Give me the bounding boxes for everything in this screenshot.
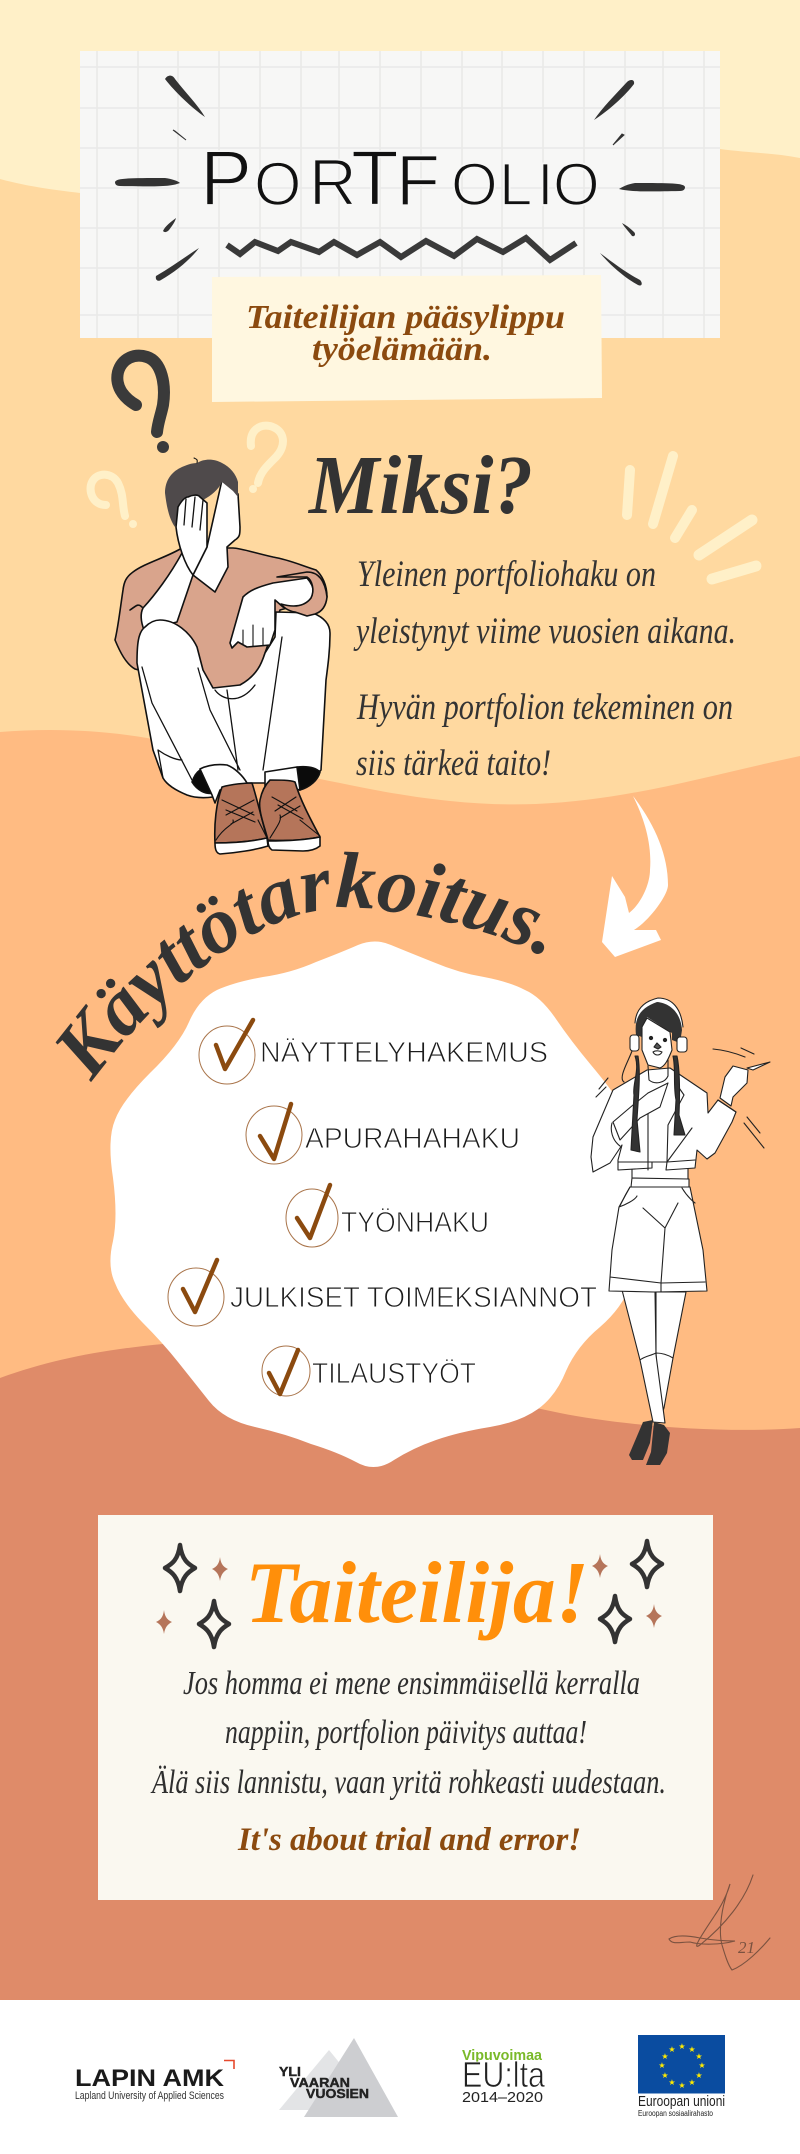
item: Apurahahaku: APURAHAHAKU bbox=[305, 1123, 520, 1155]
logo: Vipuvoimaa EU:lta bbox=[462, 2047, 546, 2106]
signature: 21 bbox=[738, 1938, 755, 1957]
title: F bbox=[396, 141, 440, 221]
text block: why: Yleinen portfoliohaku on bbox=[357, 554, 656, 595]
logo: European Union flag: Euroopan unioni bbox=[638, 2093, 725, 2110]
logo: Vipuvoimaa EU:lta: 2014–2020 bbox=[462, 2089, 543, 2106]
panel: subtitle note bbox=[212, 275, 602, 402]
logo: European Union flag: ★ bbox=[678, 2081, 686, 2090]
subtitle text bbox=[246, 299, 565, 368]
subtitle text: työelämään. bbox=[312, 331, 492, 368]
text block: encouragement: Älä siis lannistu, vaan yritä rohkeasti uudestaan. bbox=[150, 1764, 666, 1801]
logo: Yli vaaran vuosien: YLI bbox=[279, 2064, 301, 2079]
subtitle text: Taiteilijan pääsylippu bbox=[246, 299, 565, 336]
icon: dark sparkles bbox=[165, 1541, 662, 1647]
text block: encouragement: Jos homma ei mene ensimmäisellä kerralla bbox=[183, 1665, 640, 1702]
item: Työnhaku: TYÖNHAKU bbox=[341, 1207, 489, 1239]
logo: European Union flag: ★ bbox=[688, 2045, 696, 2054]
title: O bbox=[254, 150, 301, 218]
item: Julkiset toimeksiannot: JULKISET TOIMEKSIANNOT bbox=[230, 1282, 597, 1314]
logo: Lapin AMK: Lapland University of Applied Sciences bbox=[75, 2090, 224, 2102]
tagline: It's about trial and error! bbox=[237, 1822, 581, 1858]
logo: European Union flag: ★ bbox=[668, 2045, 676, 2054]
illustration: thinking man bbox=[115, 458, 330, 854]
logo: European Union flag: ★ bbox=[695, 2071, 703, 2080]
checklist bbox=[168, 1020, 597, 1396]
text block: why bbox=[353, 554, 736, 784]
title: O bbox=[553, 151, 600, 218]
logo: Yli vaaran vuosien: VAARAN bbox=[290, 2075, 350, 2090]
item: Näyttelyhakemus bbox=[199, 1020, 548, 1084]
logo: European Union flag: ★ bbox=[668, 2078, 676, 2087]
title: I bbox=[537, 151, 554, 218]
title: L bbox=[499, 151, 532, 218]
logo: European Union flag: ★ bbox=[688, 2078, 696, 2087]
logo: European Union flag: ★ bbox=[698, 2061, 706, 2070]
text block: encouragement: nappiin, portfolion päivitys auttaa! bbox=[225, 1714, 587, 1751]
logo: European Union flag bbox=[638, 2035, 725, 2118]
title: O bbox=[451, 151, 498, 218]
icon: pale question marks bbox=[91, 426, 283, 528]
heading: curved Käyttötarkoitus: Käyttötarkoitus. bbox=[56, 852, 544, 1082]
icon: pale rays bbox=[627, 456, 756, 579]
item: Tilaustyöt: TILAUSTYÖT bbox=[312, 1358, 476, 1390]
heading: Taiteilija: Taiteilija! bbox=[245, 1545, 589, 1642]
icon: brown sparkles bbox=[156, 1554, 662, 1634]
item: Julkiset toimeksiannot bbox=[168, 1260, 597, 1326]
logo: European Union flag: ★ bbox=[695, 2052, 703, 2061]
logo: Vipuvoimaa EU:lta: EU:lta bbox=[462, 2054, 546, 2095]
blob panel bbox=[110, 942, 636, 1467]
arrow bbox=[602, 796, 668, 957]
logo: Lapin AMK bbox=[75, 2060, 234, 2102]
item: Tilaustyöt bbox=[262, 1346, 476, 1396]
item: Näyttelyhakemus: NÄYTTELYHAKEMUS bbox=[260, 1037, 548, 1069]
logo: European Union flag: ★ bbox=[661, 2071, 669, 2080]
heading: Miksi: Miksi? bbox=[307, 439, 533, 532]
panel: title paper bbox=[80, 51, 720, 338]
zigzag underline bbox=[227, 238, 576, 260]
logo: European Union flag: Euroopan sosiaalirahasto bbox=[638, 2109, 713, 2118]
icon: big question mark bbox=[117, 356, 169, 453]
icon: burst rays around title bbox=[115, 76, 685, 286]
logo: Lapin AMK: LAPIN AMK bbox=[75, 2065, 225, 2092]
signature bbox=[669, 1875, 770, 1970]
panel: artist card bbox=[98, 1515, 713, 1900]
item: Työnhaku bbox=[286, 1185, 489, 1247]
title: P bbox=[200, 134, 252, 222]
item: Apurahahaku bbox=[246, 1104, 520, 1164]
logo: European Union flag: ★ bbox=[678, 2042, 686, 2051]
logo: European Union flag: ★ bbox=[658, 2061, 666, 2070]
title: T bbox=[351, 134, 399, 222]
logo: Vipuvoimaa EU:lta: Vipuvoimaa bbox=[462, 2047, 543, 2064]
logo: Yli vaaran vuosien bbox=[279, 2038, 398, 2117]
logo: European Union flag: ★ bbox=[661, 2052, 669, 2061]
text block: why: siis tärkeä taito! bbox=[356, 743, 551, 784]
illustration: girl with headphones bbox=[591, 998, 770, 1465]
logo: Yli vaaran vuosien: VUOSIEN bbox=[306, 2086, 369, 2101]
title: R bbox=[309, 145, 357, 219]
text block: encouragement bbox=[150, 1665, 666, 1801]
